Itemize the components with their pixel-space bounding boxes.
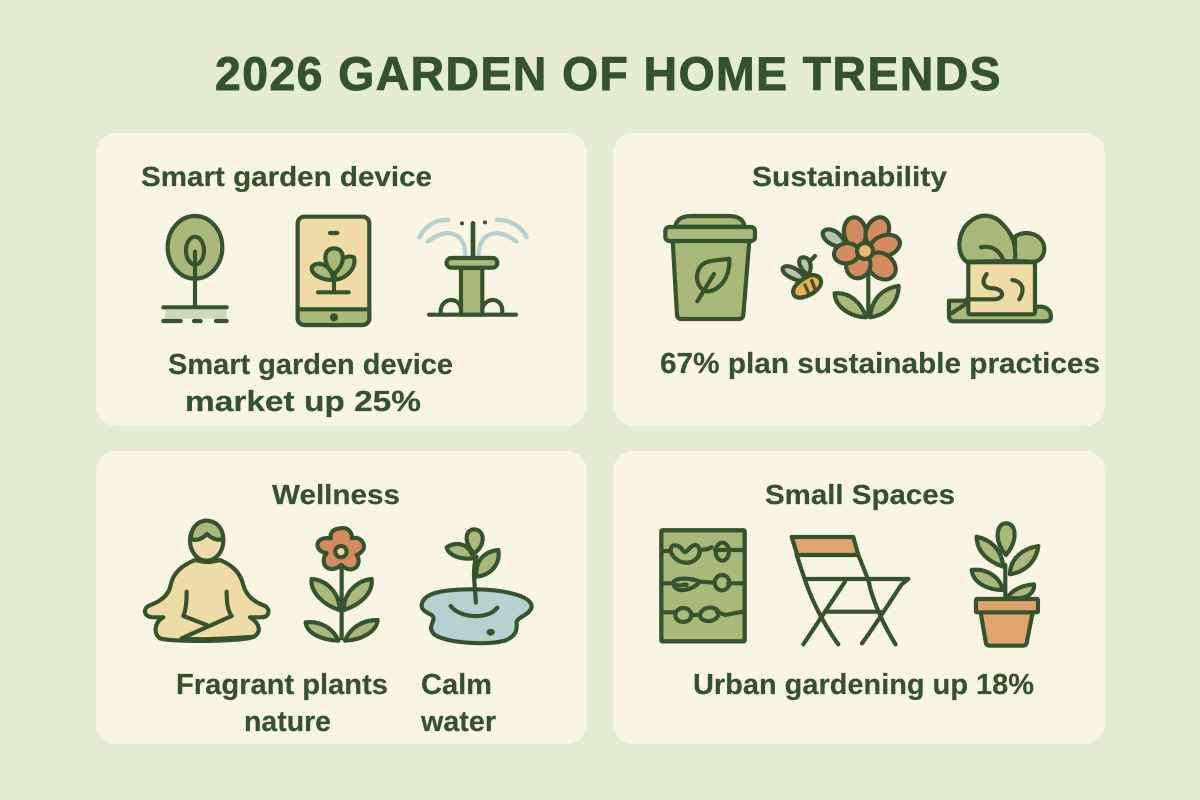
text: fragrant plants: Fragrant plants	[176, 669, 388, 701]
icon: vertical garden	[661, 530, 745, 641]
icon: potted plant	[972, 523, 1038, 646]
text: calm water	[420, 669, 496, 738]
text: market stat	[168, 349, 453, 418]
panel: sustainability	[613, 133, 1105, 426]
heading: small spaces: Small Spaces	[765, 479, 955, 510]
heading: wellness: Wellness	[272, 479, 400, 510]
text: fragrant plants: nature	[244, 706, 331, 738]
text: calm water: water	[420, 706, 496, 738]
panel: wellness	[96, 451, 587, 744]
heading: smart garden device: Smart garden device	[141, 161, 432, 192]
text: fragrant plants	[176, 669, 388, 738]
panel: small spaces	[613, 451, 1105, 744]
icon: tree sensor	[163, 216, 227, 321]
text: market stat: Smart garden device	[168, 349, 453, 381]
icon: compost planter	[949, 216, 1051, 321]
icon: fragrant flower	[306, 528, 378, 641]
icon: fountain	[419, 220, 527, 315]
icon: folding chair	[792, 537, 908, 644]
panel: smart garden device	[96, 133, 587, 426]
heading: sustainability: Sustainability	[752, 161, 947, 192]
icon: bee	[783, 256, 821, 298]
icon: flower with pollinator wing	[823, 213, 903, 317]
text: sustainable practices stat: 67% plan sustainable practices	[660, 348, 1100, 380]
icon: meditating person	[145, 521, 268, 641]
text: calm water: Calm	[421, 669, 492, 701]
text: urban gardening stat: Urban gardening up 18%	[693, 669, 1034, 701]
icon: compost bin with leaf	[665, 216, 755, 319]
title: 2026 GARDEN OF HOME TRENDS	[215, 47, 1002, 100]
text: market stat: market up 25%	[185, 386, 421, 418]
icon: smartphone with plant	[298, 217, 369, 325]
icon: plant in pond	[422, 529, 532, 643]
